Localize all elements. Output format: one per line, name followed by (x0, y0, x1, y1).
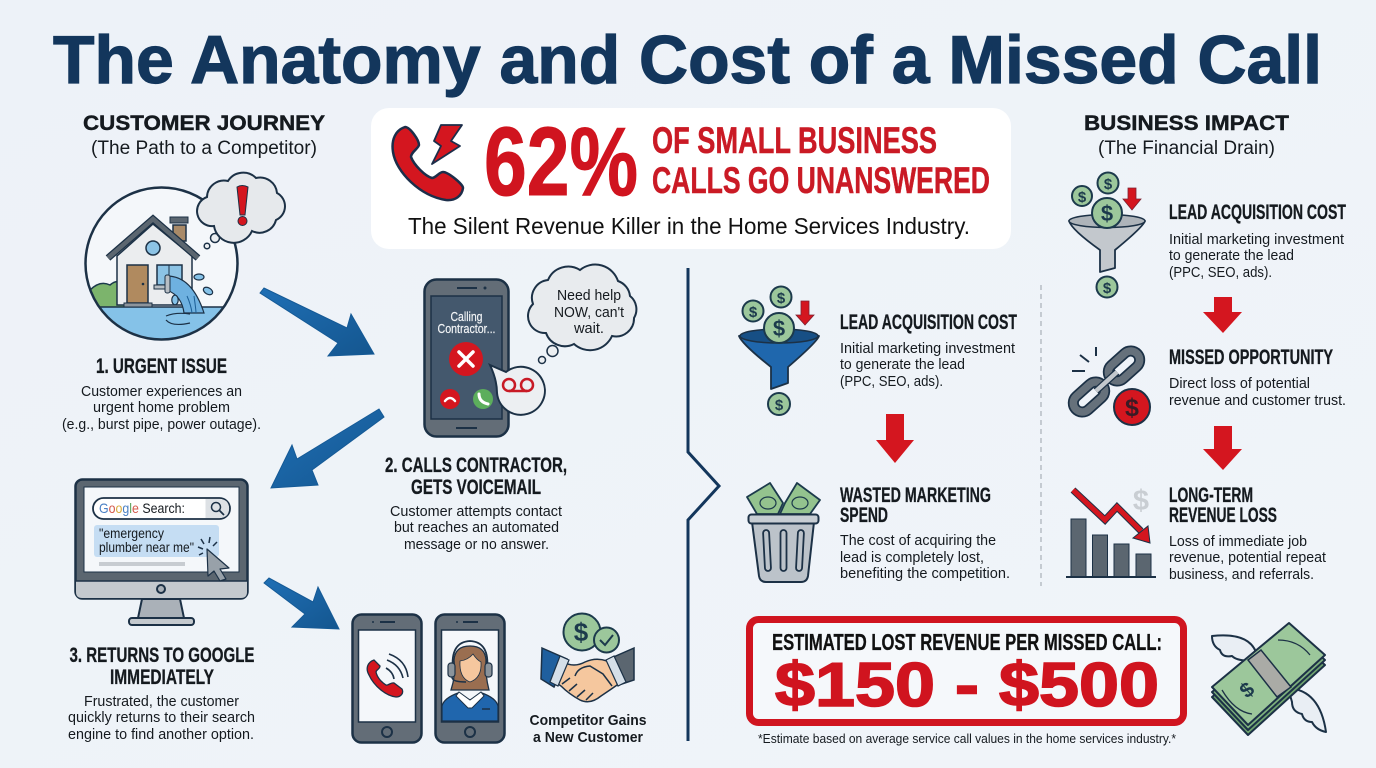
competitor gains label (530, 712, 646, 746)
text: lead acquisition cost (right): to generate the lead (1169, 247, 1294, 264)
icon: blue funnel with coins: $ (773, 316, 785, 341)
icon: grey funnel with coins: $ (1078, 189, 1087, 206)
step 2 text: GETS VOICEMAIL (411, 476, 541, 499)
competitor gains label: Competitor Gains (530, 712, 646, 729)
text: lead acquisition cost (centre): (PPC, SEO, ads). (840, 373, 943, 390)
competitor gains label: a New Customer (533, 729, 643, 746)
icon: declining bar chart: $ (1133, 485, 1149, 517)
icon: red phone with lightning bolt (393, 125, 463, 200)
text: lead acquisition cost (centre): Initial marketing investment (840, 340, 1016, 357)
icon: broken chain with red coin (1070, 347, 1150, 425)
icon: house with burst pipe (80, 173, 285, 347)
icon: phone calling contractor: Calling (450, 310, 483, 324)
dashed column divider (1040, 285, 1042, 586)
callout: need help thought cloud: Need help (557, 288, 621, 304)
heading: business impact: (The Financial Drain) (1098, 138, 1275, 159)
text: long-term revenue loss: business, and referrals. (1169, 566, 1314, 583)
text: lead acquisition cost (right): Initial marketing investment (1169, 231, 1345, 248)
text: wasted marketing spend: SPEND (840, 504, 888, 527)
text: wasted marketing spend: The cost of acquiring the (840, 532, 996, 549)
icon: trash can with money (747, 483, 820, 582)
icon: blue funnel with coins: $ (777, 290, 786, 307)
icon: grey funnel with coins: $ (1104, 176, 1113, 193)
icon: phone calling contractor (424, 265, 636, 436)
callout: need help thought cloud: wait. (573, 321, 604, 337)
text: missed opportunity: revenue and customer trust. (1169, 392, 1346, 409)
icon: grey funnel with coins (1069, 172, 1145, 298)
step 3 text: IMMEDIATELY (110, 666, 214, 689)
arrow: red down centre (876, 414, 914, 463)
icon: grey funnel with coins: $ (1103, 280, 1112, 297)
step 3 text (68, 644, 255, 743)
search phrase: "emergency (99, 526, 164, 541)
icon: phone calling contractor: Contractor... (438, 322, 496, 336)
arrow: red down right 2 (1203, 426, 1242, 470)
callout: need help thought cloud: NOW, can't (554, 305, 624, 321)
arrow: call to search (271, 409, 384, 488)
text: long-term revenue loss (1169, 484, 1327, 583)
search phrase: plumber near me" (99, 540, 194, 555)
icon: blue funnel with coins: $ (749, 304, 758, 321)
text: missed opportunity (1169, 346, 1346, 409)
icon: desktop monitor with Google search (76, 480, 248, 625)
step 1 text: Customer experiences an (81, 383, 242, 400)
icon: broken chain with red coin: $ (1125, 394, 1139, 422)
callout: estimated lost revenue: ESTIMATED LOST REVENUE PER MISSED CALL: (772, 629, 1162, 655)
footnote: *Estimate based on average service call values in the home services industry.* (758, 731, 1176, 746)
heading: customer journey: (The Path to a Competitor) (91, 138, 317, 159)
icon: flying money with wings (1212, 623, 1326, 735)
step 1 text: urgent home problem (93, 399, 230, 416)
step 2 text (385, 454, 567, 553)
text: long-term revenue loss: LONG-TERM (1169, 484, 1253, 507)
statistic label: CALLS GO UNANSWERED (652, 160, 990, 201)
step 3 text: Frustrated, the customer (84, 693, 239, 710)
statistic label (652, 120, 990, 201)
callout: estimated lost revenue (750, 620, 1184, 722)
callout: estimated lost revenue: $150 - $500 (775, 651, 1159, 720)
text: lead acquisition cost (centre) (840, 311, 1017, 390)
step 3 text: engine to find another option. (68, 726, 254, 743)
step 3 text: quickly returns to their search (68, 709, 255, 726)
icon: flying money with wings: $ (1235, 678, 1259, 703)
panel: headline statistic banner (371, 107, 1011, 249)
heading: customer journey (83, 112, 325, 159)
divider: chevron line (688, 268, 719, 741)
search query label: Google Search: (99, 500, 185, 516)
text: wasted marketing spend (840, 484, 1010, 582)
step 1 text (62, 355, 261, 433)
text: missed opportunity: Direct loss of potential (1169, 375, 1310, 392)
step 3 text: 3. RETURNS TO GOOGLE (70, 644, 254, 667)
arrow: issue to call (260, 288, 374, 356)
callout: need help thought cloud (528, 265, 636, 350)
text: wasted marketing spend: WASTED MARKETING (840, 484, 991, 507)
step 2 text: Customer attempts contact (390, 503, 563, 520)
icon: phone with ringing handset (352, 614, 422, 742)
title: The Anatomy and Cost of a Missed Call (53, 22, 1322, 98)
text: wasted marketing spend: lead is completely lost, (840, 549, 984, 566)
step 2 text: but reaches an automated (394, 519, 559, 536)
text: lead acquisition cost (centre): to generate the lead (840, 356, 965, 373)
statistic: 62%: 62% (484, 107, 638, 216)
search phrase (99, 526, 194, 555)
icon: handshake with coin and check (541, 614, 634, 702)
step 2 text: message or no answer. (404, 536, 549, 553)
icon: handshake with coin and check: $ (574, 617, 589, 647)
text: lead acquisition cost (right) (1169, 201, 1346, 281)
heading: customer journey: CUSTOMER JOURNEY (83, 112, 325, 135)
icon: blue funnel with coins (739, 286, 819, 415)
step 2 text: 2. CALLS CONTRACTOR, (385, 454, 567, 477)
statistic label: OF SMALL BUSINESS (652, 120, 937, 161)
icon: voicemail bubble (490, 365, 545, 415)
text: long-term revenue loss: revenue, potential repeat (1169, 549, 1327, 566)
icon: declining bar chart (1066, 485, 1156, 577)
icon: alert thought cloud (197, 173, 285, 243)
step 1 text: (e.g., burst pipe, power outage). (62, 416, 261, 433)
icon: grey funnel with coins: $ (1101, 201, 1113, 226)
text: long-term revenue loss: Loss of immediate job (1169, 533, 1307, 550)
arrow: search to competitor (264, 578, 339, 629)
heading: business impact: BUSINESS IMPACT (1084, 112, 1289, 135)
text: lead acquisition cost (right): (PPC, SEO, ads). (1169, 264, 1272, 281)
arrow: red down right 1 (1203, 297, 1242, 333)
icon: phone with support agent (436, 614, 504, 742)
text: long-term revenue loss: REVENUE LOSS (1169, 504, 1277, 527)
text: lead acquisition cost (centre): LEAD ACQUISITION COST (840, 311, 1017, 334)
icon: blue funnel with coins: $ (775, 397, 784, 414)
text: wasted marketing spend: benefiting the competition. (840, 565, 1010, 582)
step 1 text: 1. URGENT ISSUE (96, 355, 227, 378)
banner subtitle: The Silent Revenue Killer in the Home Services Industry. (408, 213, 970, 239)
heading: business impact (1084, 112, 1289, 159)
